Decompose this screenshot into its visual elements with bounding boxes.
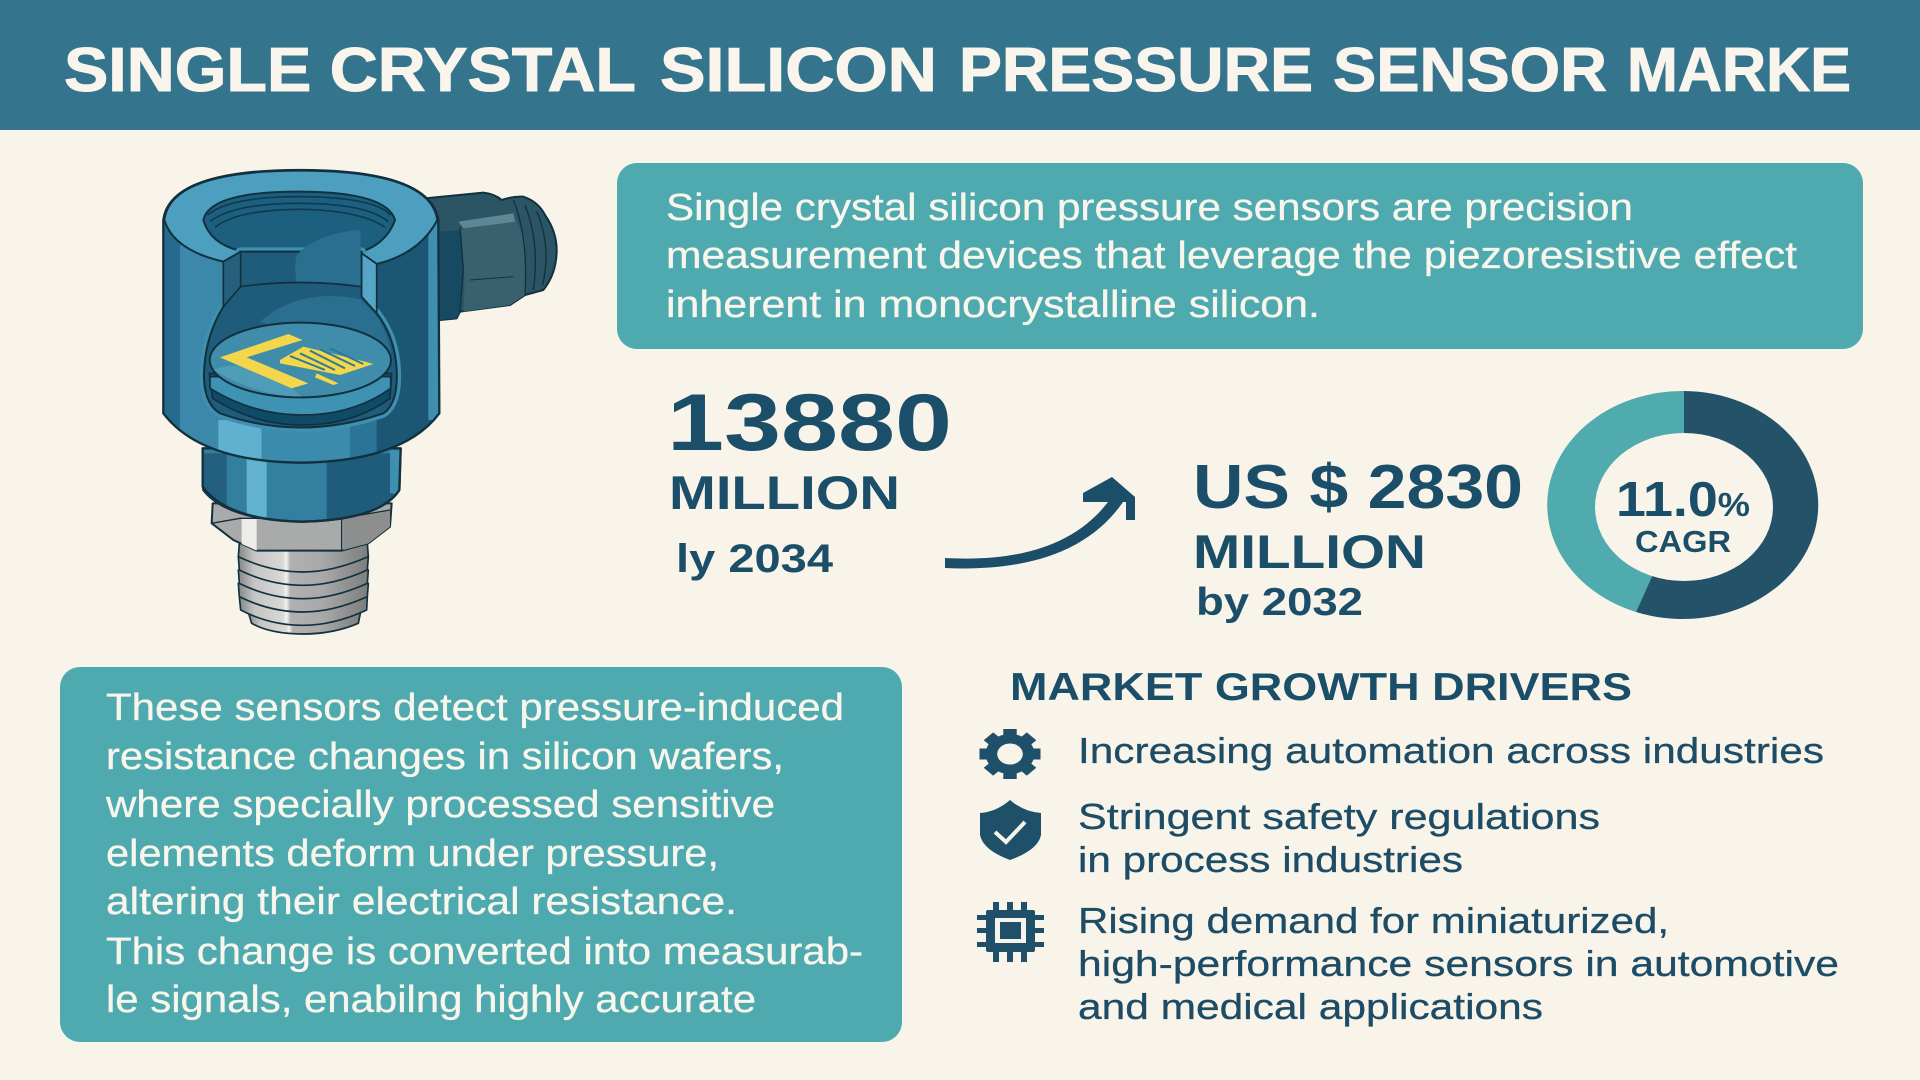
- arrow: growth: [945, 477, 1135, 568]
- header band with title: SENSOR: [1333, 36, 1607, 105]
- header band with title: PRESSURE: [959, 36, 1313, 105]
- donut chart: CAGR: CAGR: [1635, 524, 1731, 559]
- icon: chip: [977, 902, 1044, 962]
- stat: 13880 million: MILLION: [669, 466, 900, 519]
- icon: shield: [980, 800, 1041, 860]
- panel: sensor explanation: altering their electrical resistance.: [106, 881, 737, 923]
- stat: 13880 million: 13880: [667, 378, 952, 468]
- driver text: miniaturized sensors: high-performance sensors in automotive: [1078, 943, 1839, 984]
- sensing pattern: [220, 334, 373, 388]
- header band with title: MARKE: [1627, 36, 1851, 105]
- stat: 13880 million: [667, 378, 952, 581]
- stat: US$ 2830 million: [1193, 453, 1523, 624]
- cutaway window: [204, 252, 397, 427]
- main body: [163, 170, 439, 463]
- panel: intro description: Single crystal silicon pressure sensors are precision: [666, 187, 1633, 229]
- rim top: [164, 171, 437, 264]
- header band with title: SILICON: [660, 36, 937, 105]
- stat: US$ 2830 million: by 2032: [1196, 581, 1363, 624]
- panel: intro description: [617, 163, 1863, 349]
- connector: [425, 193, 557, 320]
- driver text: miniaturized sensors: and medical applications: [1078, 986, 1543, 1027]
- driver text: safety: [1078, 796, 1600, 880]
- thread: [238, 543, 368, 634]
- panel: sensor explanation: These sensors detect pressure-induced: [106, 687, 844, 729]
- lower neck: [203, 448, 401, 522]
- panel: intro description: inherent in monocrystalline silicon.: [666, 284, 1320, 326]
- panel: intro description: measurement devices that leverage the piezoresistive effect: [666, 235, 1797, 277]
- driver text: safety: Stringent safety regulations: [1078, 796, 1600, 837]
- diaphragm: [209, 373, 392, 425]
- body shading: [163, 220, 440, 467]
- heading: market growth drivers: MARKET GROWTH DRIVERS: [1010, 666, 1632, 709]
- opening: [203, 192, 395, 253]
- header band with title: [0, 0, 1920, 130]
- driver text: miniaturized sensors: [1078, 900, 1839, 1027]
- panel: sensor explanation: resistance changes in silicon wafers,: [106, 736, 784, 778]
- stat: US$ 2830 million: US $ 2830: [1193, 453, 1523, 522]
- driver text: automation: Increasing automation across industries: [1078, 730, 1824, 771]
- illustration: pressure sensor: [163, 170, 557, 634]
- panel: sensor explanation: where specially processed sensitive: [105, 784, 775, 826]
- driver text: miniaturized sensors: Rising demand for miniaturized,: [1078, 900, 1669, 941]
- panel: sensor explanation: [60, 667, 902, 1042]
- panel: sensor explanation: elements deform under pressure,: [106, 833, 719, 875]
- donut chart: CAGR: [1547, 391, 1818, 619]
- stat: US$ 2830 million: MILLION: [1193, 525, 1426, 578]
- panel: sensor explanation: le signals, enabilng highly accurate: [106, 979, 756, 1021]
- donut chart: CAGR: 11.0 %: [1616, 473, 1750, 527]
- stat: 13880 million: ly 2034: [676, 537, 834, 581]
- panel: sensor explanation: This change is converted into measurab-: [106, 931, 863, 973]
- header band with title: SINGLE CRYSTAL: [64, 36, 636, 105]
- icon: gear: [980, 729, 1040, 779]
- hex nut: [212, 503, 392, 551]
- driver text: safety: in process industries: [1078, 839, 1463, 880]
